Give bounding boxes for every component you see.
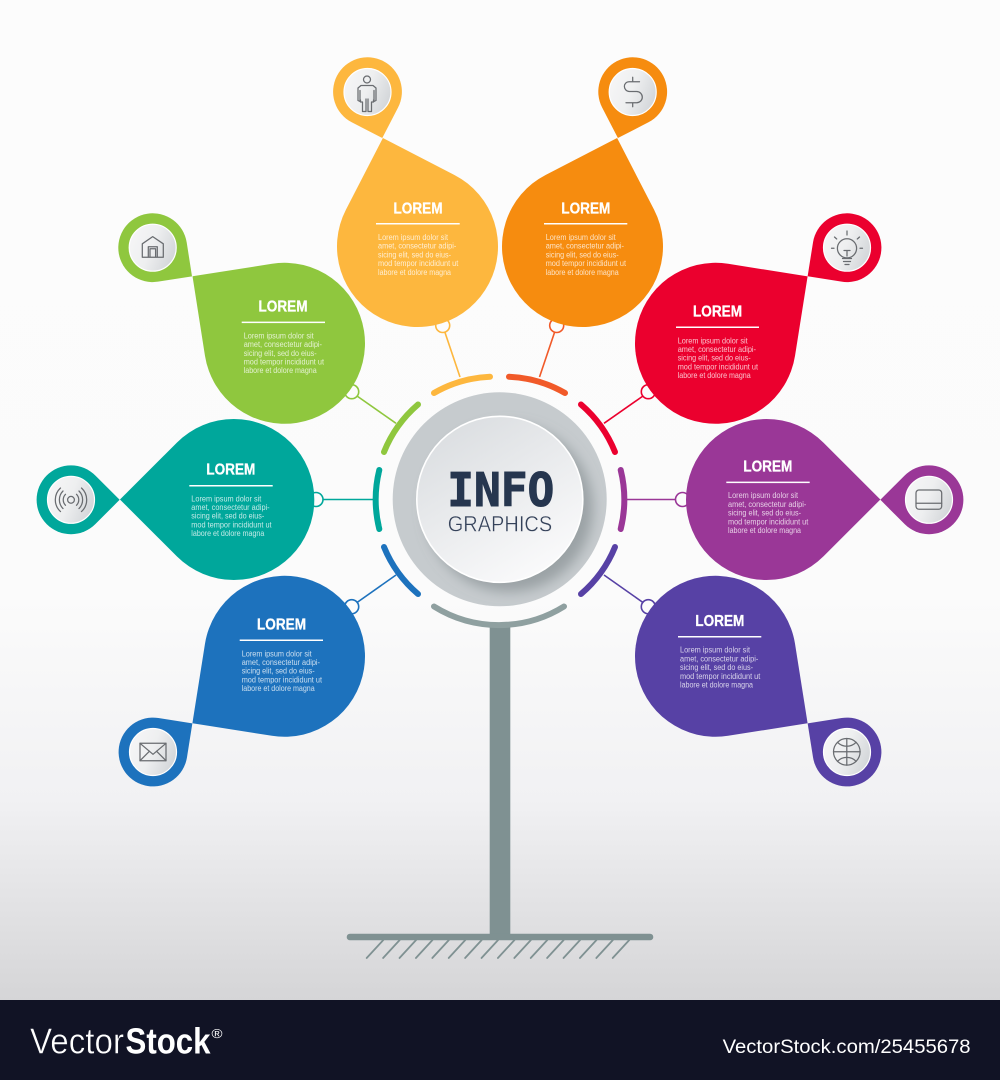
pin (321, 45, 414, 138)
logo wordmark: Stock (126, 1020, 211, 1061)
arc: green (384, 404, 418, 452)
heading: LOREM (258, 299, 308, 316)
panel: teal signal (22, 386, 373, 613)
body text: Lorem ipsum dolor sit (191, 494, 262, 503)
heading: LOREM (206, 462, 255, 479)
body text: sicing elit, sed do eius- (242, 667, 315, 676)
body text (678, 336, 759, 380)
body text: labore et dolore magna (680, 680, 753, 690)
divider (544, 223, 627, 224)
body text (728, 491, 809, 535)
icon: mail (140, 743, 166, 761)
body text: sicing elit, sed do eius- (244, 349, 317, 358)
pin (808, 713, 886, 791)
icon: person (358, 76, 376, 112)
body text: mod tempor incididunt ut (242, 675, 323, 684)
body text: labore et dolore magna (242, 684, 315, 693)
body text: sicing elit, sed do eius- (191, 512, 265, 521)
pin disc (824, 728, 870, 776)
body text: labore et dolore magna (378, 268, 451, 277)
divider (676, 326, 759, 328)
pin disc (906, 476, 952, 523)
connector (540, 318, 564, 377)
logo wordmark: Vector (30, 1020, 124, 1061)
outer gray ring (393, 392, 607, 606)
arc: blue (384, 547, 418, 594)
drop (474, 138, 691, 355)
body text: Lorem ipsum dolor sit (728, 491, 799, 500)
pin disc (609, 68, 656, 116)
icon: ball (834, 738, 860, 765)
body text: mod tempor incididunt ut (244, 358, 325, 366)
body text: mod tempor incididunt ut (191, 520, 272, 529)
divider (376, 223, 460, 224)
drop (623, 564, 808, 748)
logo wordmark: ® (212, 1026, 223, 1041)
band background (0, 1000, 1000, 1080)
body text (680, 646, 761, 690)
body text: sicing elit, sed do eius- (728, 509, 801, 518)
panel: blue mail (114, 564, 396, 791)
body text: mod tempor incididunt ut (378, 259, 459, 268)
ground hatching (367, 940, 629, 958)
title: INFO: INFO (447, 463, 554, 517)
connector (604, 385, 655, 423)
icon: signal (55, 488, 87, 512)
body text (242, 649, 323, 693)
body text: Lorem ipsum dolor sit (242, 649, 312, 658)
connector (345, 385, 396, 423)
panel: red bulb (604, 208, 886, 435)
body text: amet, consectetur adipi- (191, 503, 270, 512)
pin (22, 451, 120, 548)
drop (653, 386, 880, 613)
drop (120, 386, 348, 613)
icon: bulb (832, 231, 862, 264)
body text: amet, consectetur adipi- (728, 500, 807, 509)
body text: Lorem ipsum dolor sit (378, 233, 449, 242)
body text (546, 233, 627, 277)
heading: LOREM (394, 200, 442, 217)
body text: mod tempor incididunt ut (546, 259, 627, 268)
heading: LOREM (693, 304, 742, 321)
segment arcs around hub (376, 377, 624, 625)
body text: sicing elit, sed do eius- (680, 663, 753, 672)
body text: sicing elit, sed do eius- (378, 250, 451, 259)
body text: Lorem ipsum dolor sit (680, 646, 751, 655)
pin disc (48, 476, 94, 523)
pin (113, 208, 192, 287)
pin (114, 713, 192, 791)
central hub (393, 392, 607, 606)
body text: amet, consectetur adipi- (680, 654, 759, 663)
tree trunk and ground (347, 626, 653, 958)
body text: labore et dolore magna (678, 371, 751, 380)
body text: labore et dolore magna (546, 268, 619, 277)
trunk (490, 626, 510, 936)
ground line (347, 934, 653, 940)
drop (193, 251, 376, 435)
connector (345, 575, 396, 614)
panel: yellow person (309, 45, 526, 377)
connector (436, 318, 460, 377)
arc: yellow (434, 377, 490, 393)
divider (678, 636, 761, 638)
body text (378, 233, 459, 277)
heading: LOREM (257, 617, 306, 634)
body text: sicing elit, sed do eius- (546, 250, 619, 259)
arc: teal (376, 470, 379, 529)
body text: mod tempor incididunt ut (728, 517, 809, 526)
arc: purple (621, 470, 624, 529)
connector (309, 492, 373, 506)
body text: amet, consectetur adipi- (378, 242, 457, 251)
logo wordmark (30, 1020, 223, 1061)
divider (726, 482, 810, 483)
body text: amet, consectetur adipi- (242, 658, 320, 667)
body text: labore et dolore magna (728, 526, 801, 535)
body text: amet, consectetur adipi- (244, 340, 322, 349)
panel: orange dollar (474, 45, 691, 377)
connector (604, 575, 655, 614)
pin (880, 451, 978, 548)
body text: Lorem ipsum dolor sit (546, 233, 616, 242)
pin (586, 45, 679, 138)
drop (623, 251, 808, 435)
image reference: VectorStock.com/25455678 (723, 1037, 971, 1058)
heading: LOREM (561, 200, 610, 217)
arc: violet (581, 547, 615, 594)
pin disc (344, 68, 391, 116)
panel: green home (113, 208, 396, 435)
body text (191, 494, 272, 538)
heading: LOREM (743, 459, 792, 476)
body text: mod tempor incididunt ut (678, 362, 759, 371)
body text (244, 331, 325, 375)
divider (189, 485, 273, 486)
heading: LOREM (695, 613, 744, 630)
inner disc (417, 416, 583, 582)
arc: red (581, 404, 615, 452)
drop (192, 564, 377, 748)
icon: home (142, 237, 163, 257)
body text: labore et dolore magna (191, 529, 265, 538)
pin (808, 208, 886, 287)
connector (627, 492, 690, 506)
body text: amet, consectetur adipi- (678, 345, 756, 354)
body text: sicing elit, sed do eius- (678, 354, 751, 363)
body text: labore et dolore magna (244, 366, 317, 375)
body text: mod tempor incididunt ut (680, 672, 761, 681)
body text: Lorem ipsum dolor sit (244, 331, 314, 340)
panel: purple card (627, 386, 978, 613)
icon: dollar (624, 77, 642, 107)
pin disc (130, 728, 176, 776)
arc: orange (509, 377, 565, 393)
icon: card (916, 490, 942, 509)
drop (309, 138, 526, 355)
footer band (0, 1000, 1000, 1080)
divider (240, 640, 323, 641)
pin disc (129, 224, 176, 271)
body text: amet, consectetur adipi- (546, 242, 624, 251)
panel: violet ball (604, 564, 886, 791)
pin disc (824, 224, 870, 271)
body text: Lorem ipsum dolor sit (678, 336, 748, 345)
divider (242, 322, 325, 323)
arc: gray base (434, 606, 564, 625)
disc shadow (425, 424, 593, 592)
subtitle: GRAPHICS: GRAPHICS (448, 512, 552, 537)
